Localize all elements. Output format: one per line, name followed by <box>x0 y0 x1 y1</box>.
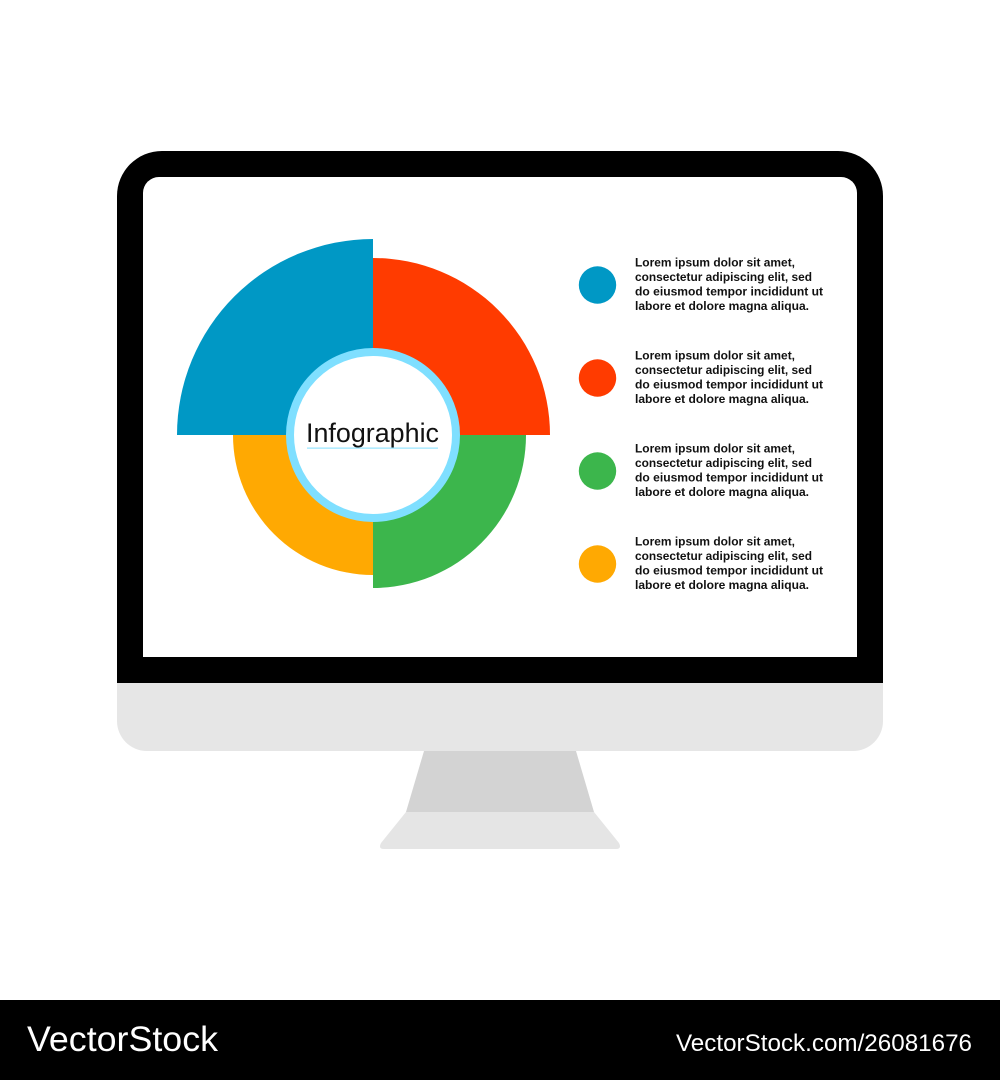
green item text: do eiusmod tempor incididunt ut <box>635 470 823 484</box>
center title: Infographic <box>306 418 439 448</box>
footer background <box>0 1000 1000 1080</box>
blue segment <box>177 239 373 435</box>
legend item: orange <box>579 534 823 592</box>
monitor stand neck <box>406 751 594 812</box>
legend item: red <box>579 348 823 406</box>
blue item text: labore et dolore magna aliqua. <box>635 299 809 313</box>
orange segment <box>233 435 373 575</box>
red item text: consectetur adipiscing elit, sed <box>635 363 812 377</box>
green segment <box>373 435 526 588</box>
footer image id: VectorStock.com/26081676 <box>676 1030 972 1057</box>
center circle <box>290 352 456 518</box>
monitor chin <box>117 683 883 751</box>
monitor <box>117 151 883 849</box>
monitor screen <box>143 177 857 657</box>
red item text: labore et dolore magna aliqua. <box>635 392 809 406</box>
blue item text: do eiusmod tempor incididunt ut <box>635 284 823 298</box>
orange item text: labore et dolore magna aliqua. <box>635 578 809 592</box>
red item text: do eiusmod tempor incididunt ut <box>635 378 823 392</box>
green item text: consectetur adipiscing elit, sed <box>635 456 812 470</box>
orange item text: do eiusmod tempor incididunt ut <box>635 564 823 578</box>
green item text: Lorem ipsum dolor sit amet, <box>635 442 795 456</box>
legend item: blue <box>579 256 823 313</box>
orange item text: consectetur adipiscing elit, sed <box>635 549 812 563</box>
legend <box>579 256 823 592</box>
red item text: Lorem ipsum dolor sit amet, <box>635 348 795 362</box>
donut chart <box>177 239 550 588</box>
monitor stand base <box>380 812 620 849</box>
green marker <box>579 452 616 490</box>
title underline <box>307 448 438 449</box>
red segment <box>373 258 550 435</box>
monitor bezel <box>117 151 883 683</box>
legend item: green <box>579 442 823 499</box>
green item text: labore et dolore magna aliqua. <box>635 485 809 499</box>
blue item text: Lorem ipsum dolor sit amet, <box>635 256 795 270</box>
footer logo: VectorStock <box>27 1020 219 1059</box>
blue item text: consectetur adipiscing elit, sed <box>635 270 812 284</box>
footer bar <box>0 1000 1000 1080</box>
blue marker <box>579 266 616 304</box>
red marker <box>579 359 616 397</box>
orange marker <box>579 545 616 583</box>
orange item text: Lorem ipsum dolor sit amet, <box>635 534 795 548</box>
